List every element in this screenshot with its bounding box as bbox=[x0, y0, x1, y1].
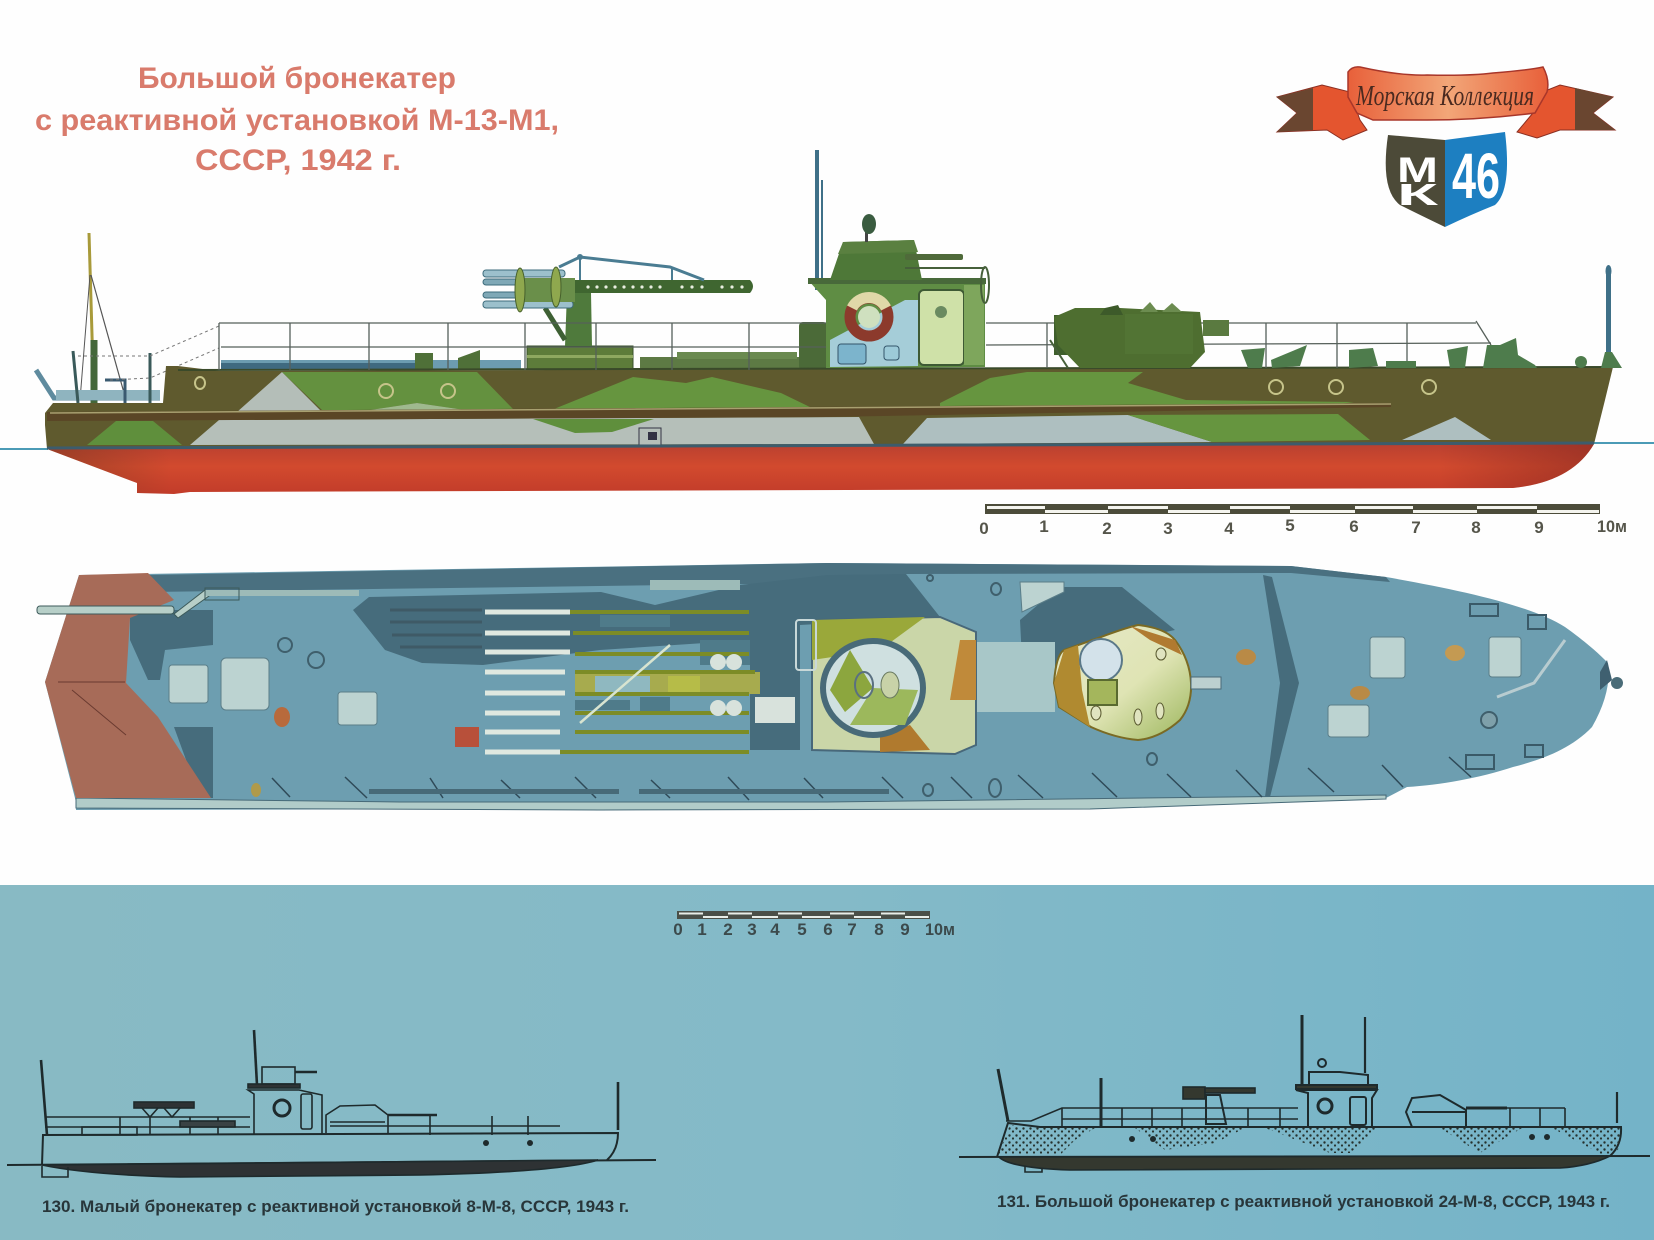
ribbon: Морская Коллекция bbox=[1355, 80, 1534, 112]
scale bar main: 9 bbox=[1534, 518, 1544, 537]
turret 130 bbox=[326, 1105, 437, 1133]
portholes 131 bbox=[1129, 1134, 1550, 1142]
aft fittings bbox=[251, 638, 479, 797]
wheelhouse plan bbox=[796, 617, 976, 754]
launcher 130 bbox=[82, 1102, 235, 1135]
deck equipment aft bbox=[221, 322, 827, 370]
shield bbox=[1386, 132, 1507, 227]
scale bar main bbox=[979, 504, 1627, 538]
stern mast and fittings bbox=[36, 233, 219, 403]
shield: К bbox=[1397, 177, 1438, 212]
rudder 131 bbox=[1025, 1166, 1042, 1172]
hull outline 130 bbox=[42, 1133, 618, 1165]
rudder 130 bbox=[42, 1166, 68, 1177]
title bbox=[35, 62, 559, 177]
scale bar main: 1 bbox=[1039, 517, 1049, 536]
main ship deck plan bbox=[37, 563, 1623, 810]
small scale bar in panel: 10м bbox=[925, 920, 955, 939]
caption 130: 130. Малый бронекатер с реактивной установкой 8-М-8, СССР, 1943 г. bbox=[42, 1197, 629, 1216]
shadow patches bbox=[130, 574, 1175, 798]
scale bar main: 3 bbox=[1163, 519, 1173, 538]
rails 131 bbox=[1006, 1108, 1298, 1121]
title: Большой бронекатер bbox=[138, 62, 456, 95]
hull outline 131 bbox=[997, 1123, 1621, 1157]
hull camouflage above waterline bbox=[45, 366, 1613, 449]
forward turret plan bbox=[1054, 625, 1221, 740]
deck side strip bbox=[76, 795, 1386, 810]
wheelhouse 130 bbox=[248, 1067, 322, 1135]
small scale bar in panel: 9 bbox=[900, 920, 910, 939]
shield: 46 bbox=[1452, 140, 1500, 212]
small scale bar in panel: 8 bbox=[874, 920, 884, 939]
scale bar main: 10м bbox=[1597, 517, 1627, 536]
rocket launcher 8 tube M-13-M1 bbox=[483, 254, 753, 369]
shield: М bbox=[1397, 151, 1438, 190]
small scale bar in panel: 3 bbox=[747, 920, 757, 939]
guard rails bbox=[219, 321, 1491, 370]
scale bar main: 4 bbox=[1224, 519, 1234, 538]
scale bar main: 0 bbox=[979, 519, 989, 538]
title: с реактивной установкой М-13-М1, bbox=[35, 104, 559, 137]
dark shadow strip top bbox=[148, 563, 1390, 592]
small scale bar in panel: 5 bbox=[797, 920, 807, 939]
scale bar main: 6 bbox=[1349, 517, 1359, 536]
wheelhouse 131 bbox=[1296, 1059, 1377, 1127]
emblem: Marine Collection ribbon and shield bbox=[1277, 67, 1615, 227]
launcher 131 bbox=[1183, 1087, 1255, 1124]
stern brown area bbox=[45, 573, 211, 798]
waterline 130 bbox=[7, 1160, 656, 1165]
rocket launcher rails plan bbox=[390, 610, 795, 752]
life ring bbox=[850, 297, 888, 336]
foredeck vents and bow fittings bbox=[1241, 265, 1622, 368]
deck side scuppers and rail rack bbox=[272, 757, 1471, 800]
connecting deck panel bbox=[977, 642, 1055, 712]
breakwater chevron bbox=[1263, 575, 1299, 797]
underwater hull 131 bbox=[999, 1156, 1610, 1170]
aft hatches bbox=[169, 658, 377, 725]
rub strake and boot stripe bbox=[47, 367, 1613, 448]
launcher deck shading bbox=[575, 615, 750, 711]
silhouette: boat 131 bbox=[959, 1015, 1650, 1172]
plan hull bbox=[45, 563, 1609, 810]
lower blue panel bbox=[0, 885, 1654, 1240]
turret 131 bbox=[1406, 1095, 1507, 1127]
small scale bar in panel: 1 bbox=[697, 920, 707, 939]
wheelhouse with life ring bbox=[808, 214, 989, 368]
forward hatches bbox=[1020, 582, 1521, 737]
waterline bbox=[0, 443, 1654, 449]
main ship side profile bbox=[0, 150, 1654, 538]
small scale bar in panel: 7 bbox=[847, 920, 857, 939]
camouflage stipple 131 bbox=[998, 1125, 1621, 1156]
forward tank turret bbox=[1050, 302, 1229, 368]
hull red underwater bbox=[47, 444, 1594, 494]
underwater hull 130 bbox=[42, 1160, 598, 1177]
main mast bbox=[817, 150, 822, 290]
small scale bar in panel: 0 bbox=[673, 920, 683, 939]
title: СССР, 1942 г. bbox=[195, 144, 401, 177]
waterline 131 bbox=[959, 1156, 1650, 1157]
small scale bar in panel: 2 bbox=[723, 920, 733, 939]
stern gun bbox=[37, 580, 740, 618]
ribbon bbox=[1277, 67, 1615, 140]
caption 131: 131. Большой бронекатер с реактивной установкой 24-М-8, СССР, 1943 г. bbox=[997, 1192, 1610, 1211]
scale bar main: 5 bbox=[1285, 516, 1295, 535]
scale bar main: 2 bbox=[1102, 519, 1112, 538]
forward fittings and anchor gear bbox=[923, 575, 1623, 797]
silhouette: boat 130 bbox=[7, 1030, 656, 1177]
portholes 130 bbox=[483, 1140, 533, 1146]
masts 131 bbox=[998, 1015, 1617, 1127]
small scale bar in panel: 6 bbox=[823, 920, 833, 939]
scale bar main: 8 bbox=[1471, 518, 1481, 537]
small scale bar in panel bbox=[673, 911, 955, 939]
small scale bar in panel: 4 bbox=[770, 920, 780, 939]
scale bar main: 7 bbox=[1411, 518, 1421, 537]
masts 130 bbox=[41, 1030, 618, 1135]
rails 130 bbox=[45, 1116, 250, 1118]
